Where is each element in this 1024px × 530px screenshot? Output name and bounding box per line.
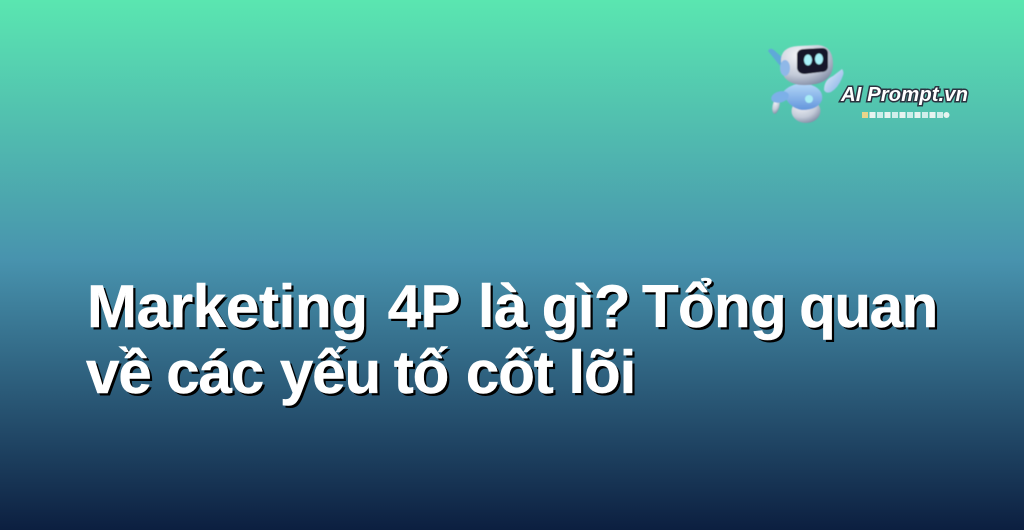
logo wordmark: AI Prompt.vn [840, 84, 968, 106]
title [86, 273, 938, 408]
logo small icon row [862, 112, 950, 118]
title: Marketing 4P là gì? Tổng quan [87, 273, 937, 340]
logo: AI Prompt.vn robot mascot [768, 44, 969, 124]
title: về các yếu tố cốt lõi [86, 339, 635, 406]
icon: robot [768, 45, 844, 123]
